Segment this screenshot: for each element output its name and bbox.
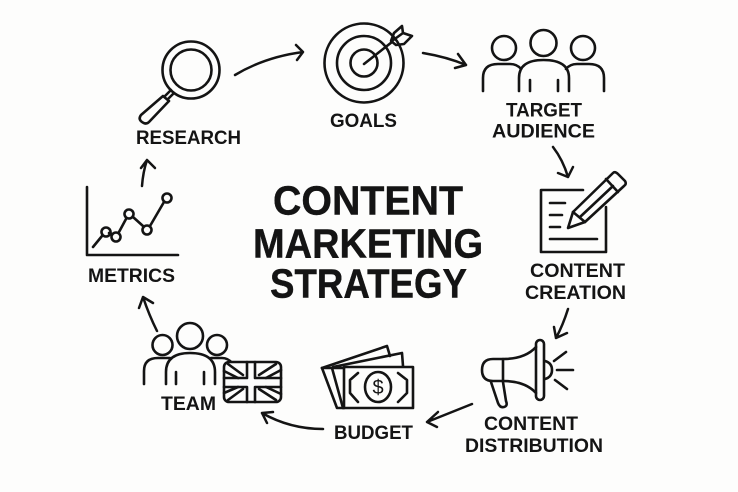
label: target audience <box>492 100 595 142</box>
arrow: metrics to research <box>141 160 155 186</box>
label: target audience: AUDIENCE <box>492 120 595 142</box>
label: goals: GOALS <box>330 110 397 132</box>
label: content creation <box>525 260 626 304</box>
title <box>253 178 483 306</box>
icon: content creation <box>541 172 626 252</box>
label: metrics: METRICS <box>88 265 175 287</box>
label: content distribution: DISTRIBUTION <box>465 435 603 457</box>
icon: magnifying glass <box>140 42 220 124</box>
label: team: TEAM <box>161 393 216 415</box>
label: budget: BUDGET <box>334 422 413 444</box>
title: STRATEGY <box>270 260 467 306</box>
icon: money: $ <box>372 377 384 399</box>
arrow: budget to team <box>262 412 323 429</box>
label: target audience: TARGET <box>506 100 582 122</box>
label: content distribution <box>465 413 603 457</box>
arrow: team to metrics <box>139 297 157 331</box>
label: content creation: CONTENT <box>530 260 625 282</box>
arrow: goals to target audience <box>423 53 466 68</box>
label: content distribution: CONTENT <box>484 413 578 435</box>
icon: metrics chart <box>87 187 178 255</box>
label: research: RESEARCH <box>136 127 241 149</box>
icon: money <box>322 346 413 408</box>
icon: target audience <box>483 30 604 91</box>
arrow: target audience to content creation <box>553 147 573 177</box>
icon: union flag <box>224 362 281 402</box>
title: CONTENT <box>273 178 463 224</box>
icon: team <box>144 323 232 384</box>
title: MARKETING <box>253 220 483 266</box>
icon: megaphone <box>482 340 573 407</box>
arrow: distribution to budget <box>427 404 472 427</box>
icon: target <box>324 24 412 102</box>
arrow: content creation to distribution <box>554 309 568 338</box>
label: content creation: CREATION <box>525 282 626 304</box>
arrow: research to goals <box>235 45 303 75</box>
